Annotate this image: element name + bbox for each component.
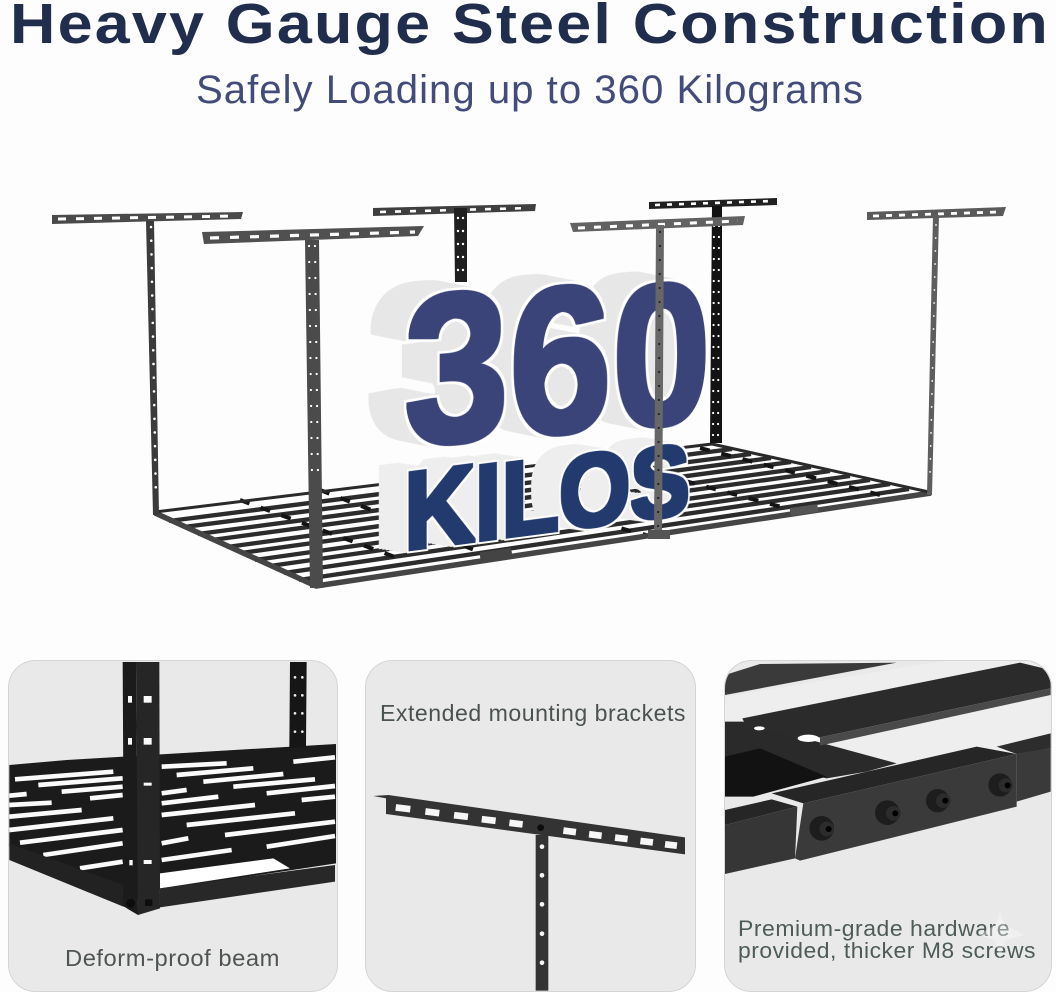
shelf [9,744,336,907]
front left post [52,212,243,515]
hardware photo [725,643,1051,874]
panel: deform-proof beam [8,660,338,992]
caption: Premium-grade hardware [738,916,1010,941]
caption: Extended mounting brackets [380,700,686,726]
shelf frame [9,843,123,907]
icon: sparkle [978,912,1024,960]
screws [809,773,1013,841]
platform frame [155,444,931,586]
caption: Deform-proof beam [65,945,280,971]
rack shelf platform [155,444,931,586]
rear post [289,662,307,748]
front center post [202,226,424,588]
cross beams [240,448,880,557]
right post [867,207,1006,495]
panel: premium hardware: provided, thicker M8 screws [738,938,1036,963]
bracket photo [373,795,685,991]
overhead rack product illustration [52,198,1006,588]
360 numerals: 360 [404,228,711,490]
beam photo [9,662,336,915]
main post [123,662,138,915]
back left post [373,204,536,282]
panel: extended mounting brackets [366,660,696,992]
back right post [649,198,777,443]
KILOS lettering: KILOS [404,414,690,574]
subtitle: Safely Loading up to 360 Kilograms [196,68,864,112]
panel: premium hardware [724,643,1052,992]
frame connector [479,548,512,561]
front right post overlapping numerals [570,216,745,539]
